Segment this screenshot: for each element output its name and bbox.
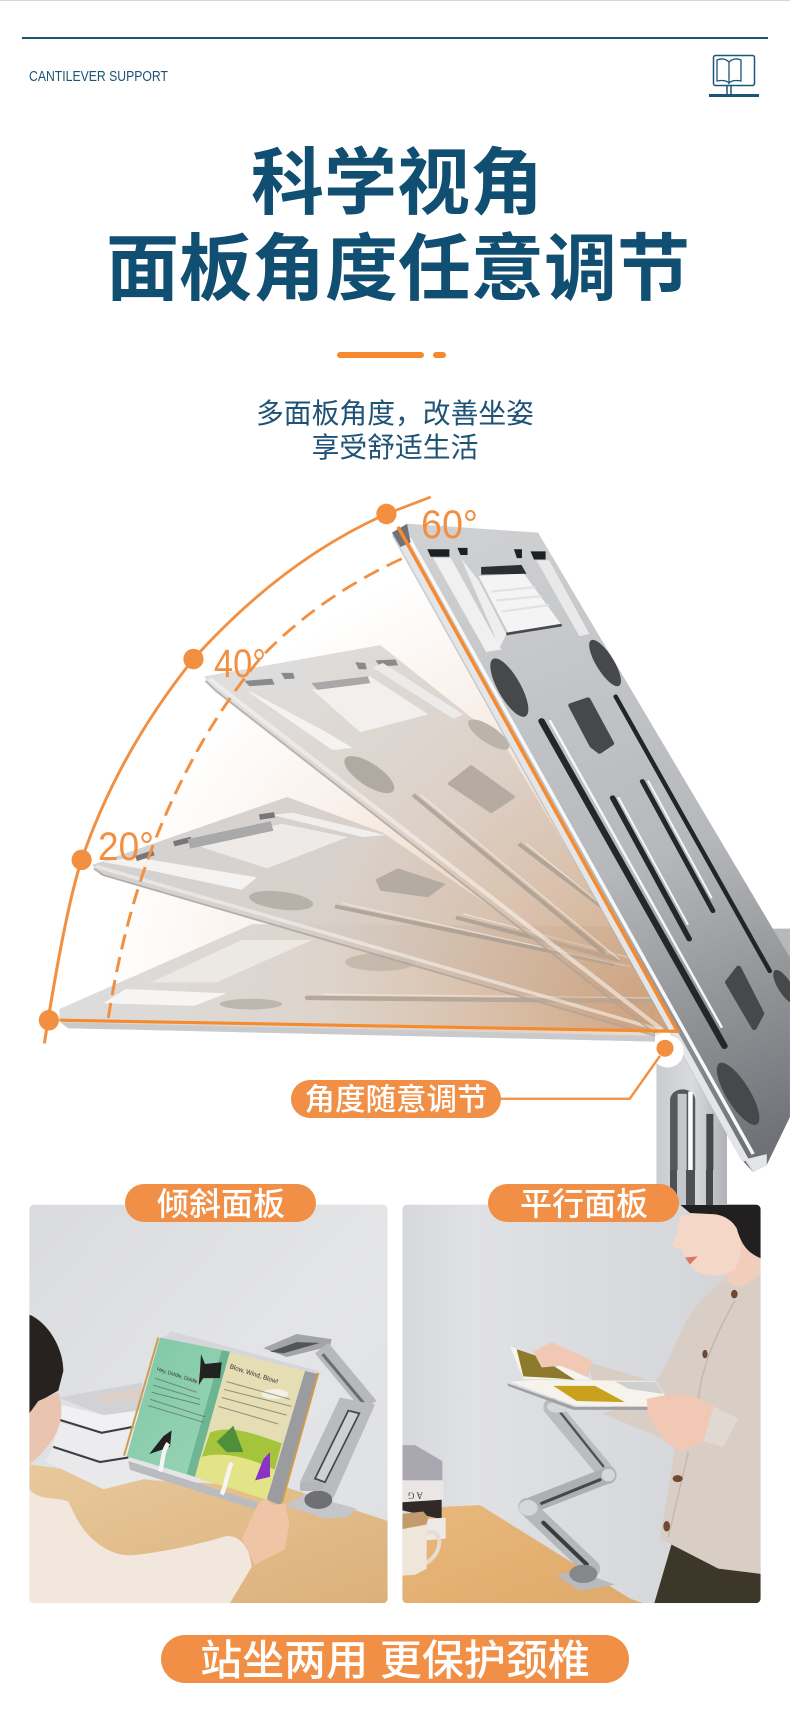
angle labels: 40° <box>214 642 266 686</box>
stand upper link <box>263 1334 332 1357</box>
pivot with leader line <box>496 1035 684 1099</box>
stack of books <box>45 1383 153 1489</box>
book text: Blow, Wind, Blow! <box>229 1363 279 1386</box>
wall <box>402 1205 761 1603</box>
header rule <box>22 37 768 39</box>
stand diagonal link <box>315 1343 377 1410</box>
icon: book on stand <box>709 56 759 96</box>
panel at 60 degrees <box>392 524 790 1172</box>
fan gradient wedge <box>59 534 678 1031</box>
cardigan cuff <box>703 1406 738 1447</box>
open book <box>124 1338 318 1505</box>
wall <box>30 1204 388 1521</box>
arc markers <box>39 504 396 1030</box>
bottom banner: 站坐两用 更保护颈椎 <box>200 1637 590 1684</box>
subtitle: 多面板角度，改善坐姿 <box>256 398 534 429</box>
orange angle lines <box>59 527 678 1031</box>
zigzag arm <box>527 1407 608 1569</box>
desk <box>29 1465 388 1603</box>
clips and book tabs <box>427 548 589 652</box>
subtitle <box>256 398 534 463</box>
page clips <box>160 1443 232 1495</box>
dashed arc <box>108 556 408 1018</box>
child hair <box>29 1315 63 1413</box>
subtitle: 享受舒适生活 <box>312 432 478 463</box>
stand lower frame <box>300 1398 375 1498</box>
desk <box>402 1505 643 1603</box>
stand diagonal slot <box>323 1354 363 1403</box>
pill: parallel panel <box>488 1184 679 1222</box>
book text <box>157 1364 278 1384</box>
solid arc <box>44 497 431 1043</box>
woman lower hand <box>647 1394 713 1451</box>
woman lips <box>685 1256 698 1265</box>
stand base <box>285 1482 357 1518</box>
pill: tilted panel: 倾斜面板 <box>157 1186 285 1222</box>
child face <box>29 1392 61 1465</box>
books: A G <box>408 1490 423 1501</box>
book text lines <box>148 1378 292 1424</box>
photo: parallel panel <box>402 1205 761 1603</box>
stand lower opening <box>315 1411 359 1482</box>
pill: tilted panel <box>125 1184 316 1222</box>
photo: tilted panel <box>29 1205 388 1603</box>
angle labels <box>98 503 478 869</box>
book text: Hey, Diddle, Diddle <box>156 1366 198 1385</box>
title: 科学视角 <box>251 143 543 224</box>
woman upper hand <box>533 1342 592 1376</box>
woman cardigan <box>588 1274 761 1574</box>
long slots <box>542 697 770 1046</box>
woman hair <box>680 1205 761 1258</box>
arm base <box>557 1565 615 1591</box>
woman face <box>672 1209 741 1276</box>
child hand <box>242 1498 289 1565</box>
open magazine <box>510 1346 668 1406</box>
panel at 40 degrees <box>204 645 675 1034</box>
cardigan placket <box>668 1301 735 1537</box>
support post <box>656 1056 727 1205</box>
mug <box>402 1511 439 1576</box>
arm hubs <box>519 1401 615 1516</box>
angle labels: 20° <box>98 825 154 869</box>
rear panel piece <box>761 929 790 969</box>
panel at 0 degrees <box>59 924 655 1042</box>
orange accent bars <box>337 352 446 358</box>
cardigan buttons <box>663 1290 738 1532</box>
post bottom in front of card <box>657 1170 727 1205</box>
header label: CANTILEVER SUPPORT <box>29 69 168 85</box>
child sweater <box>29 1489 252 1603</box>
stand upper slot <box>270 1342 320 1353</box>
angle diagram <box>39 497 790 1205</box>
top photo sliver <box>0 0 790 1</box>
title <box>106 143 690 310</box>
woman neck <box>723 1241 761 1288</box>
title: 面板角度任意调节 <box>106 229 690 310</box>
panel at 20 degrees <box>92 797 670 1036</box>
books <box>402 1445 446 1540</box>
book rest lower edge <box>128 1461 259 1510</box>
angle labels: 60° <box>421 503 478 547</box>
reading panel <box>508 1384 648 1410</box>
woman skirt <box>654 1544 761 1603</box>
pill: parallel panel: 平行面板 <box>520 1186 648 1222</box>
rubber pads <box>483 636 790 1130</box>
callout pill: angle adjust: 角度随意调节 <box>304 1083 488 1117</box>
book rest top edge <box>163 1332 318 1375</box>
